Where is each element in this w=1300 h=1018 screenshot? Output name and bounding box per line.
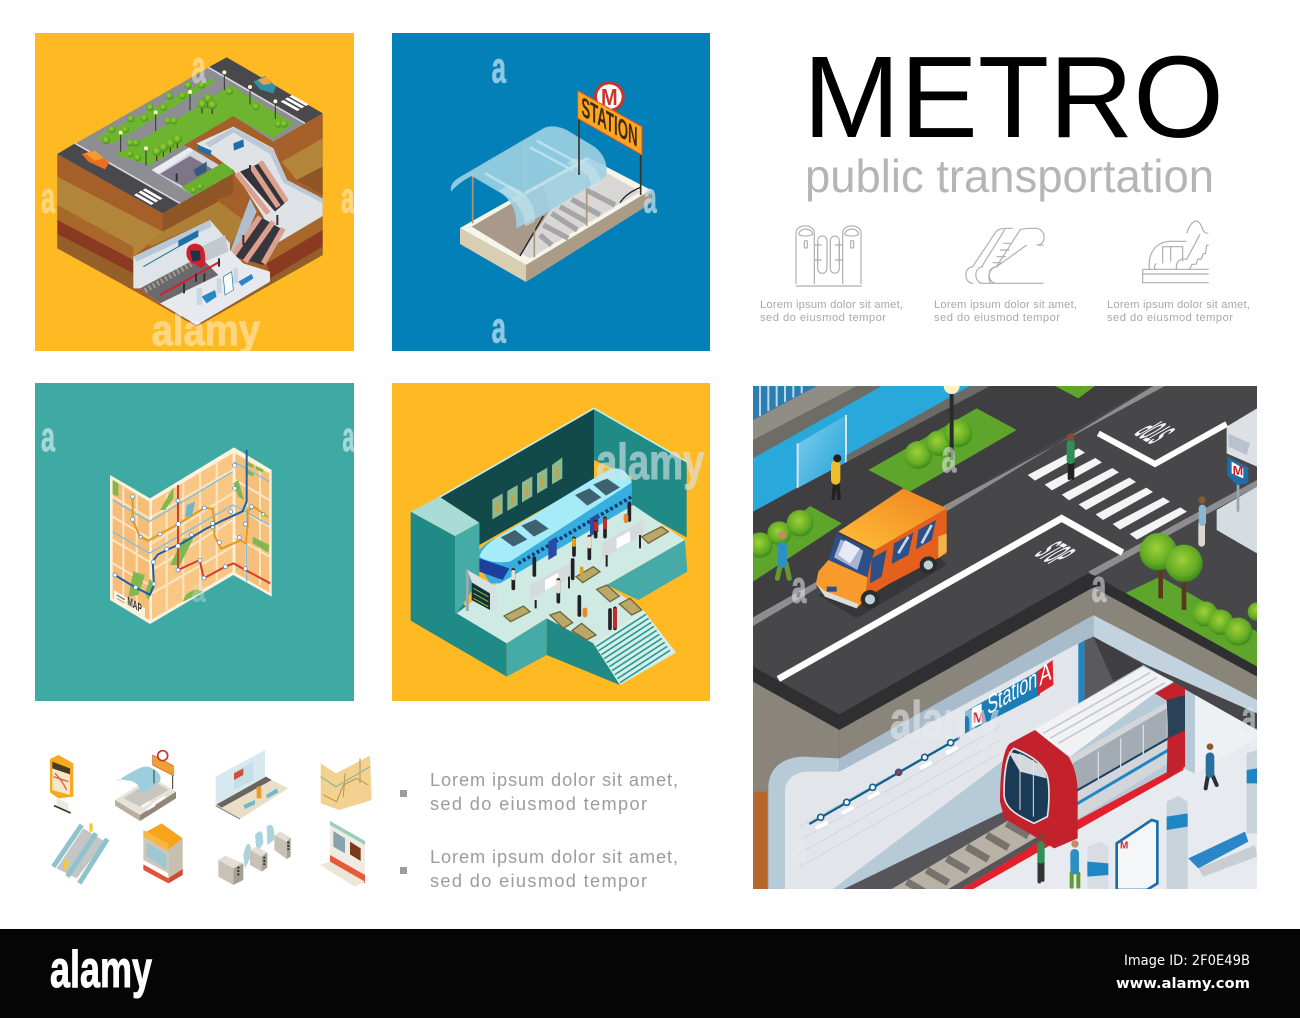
metro sign and right structures: M — [1233, 464, 1243, 478]
watermarks — [792, 431, 1257, 873]
footer bar — [0, 929, 1300, 1018]
track — [842, 810, 1057, 893]
panel: metro platform hall — [392, 383, 710, 701]
station name sign — [965, 655, 1053, 733]
line icon captions: sed do eiusmod tempor — [1107, 312, 1233, 324]
watermarks: a — [643, 175, 657, 223]
station name sign: Station — [987, 662, 1037, 721]
watermarks: a — [942, 431, 957, 482]
platform furniture — [1087, 750, 1257, 890]
soil block right face — [197, 113, 323, 327]
glass canopy — [451, 126, 607, 257]
metro sign and right structures — [1217, 408, 1257, 553]
icon: info kiosk — [50, 755, 73, 813]
watermark — [41, 42, 355, 355]
watermarks: a — [41, 413, 56, 460]
watermark: a — [192, 42, 206, 93]
metro train — [1000, 667, 1185, 848]
station name sign: A — [1039, 655, 1052, 692]
panel: underground station cutaway — [35, 33, 355, 355]
road slab edge — [753, 573, 1257, 890]
lawns and bushes — [747, 386, 1266, 667]
upper concourse and escalators — [197, 127, 323, 265]
van — [816, 488, 947, 618]
icon: turnstile — [796, 226, 862, 286]
station sign: M — [601, 84, 618, 110]
watermarks: a — [1242, 692, 1257, 743]
watermarks: a — [192, 573, 206, 610]
street and park surface — [57, 57, 323, 213]
kerbs — [753, 386, 1257, 626]
train — [479, 468, 632, 583]
platform floor and stairs — [457, 505, 687, 685]
pedestrians on street — [777, 434, 1206, 578]
watermarks: alamy — [890, 691, 999, 750]
road markings — [778, 424, 1227, 679]
watermarks: a — [1092, 561, 1107, 612]
benches and barriers — [504, 520, 668, 640]
icon: metro train and escalator — [1143, 221, 1209, 283]
soil block base — [57, 57, 323, 327]
map paper — [110, 447, 272, 624]
map legend: MAP — [127, 595, 142, 616]
watermark: a — [41, 175, 56, 223]
watermark: alamy — [152, 306, 261, 355]
passengers — [513, 503, 629, 628]
watermarks: a — [492, 45, 507, 93]
icon: map — [321, 756, 372, 810]
footer image id: Image ID: 2F0E49B — [1124, 953, 1250, 969]
line icons row — [795, 220, 1209, 287]
passengers on platform — [1038, 743, 1217, 887]
icon: platform section — [216, 750, 288, 820]
bullet text 1: sed do eiusmod tempor — [430, 794, 647, 814]
bullet text 2: Lorem ipsum dolor sit amet, — [430, 847, 678, 867]
road text: stop: STOP — [1125, 415, 1185, 449]
subtitle: public transportation — [805, 150, 1214, 202]
watermarks — [492, 45, 657, 353]
small icon set — [50, 750, 372, 886]
watermarks — [41, 413, 355, 610]
soil block left face — [57, 154, 257, 327]
line icon captions: Lorem ipsum dolor sit amet, — [934, 299, 1077, 311]
lower platform and train — [133, 165, 277, 325]
line icon captions: Lorem ipsum dolor sit amet, — [760, 299, 903, 311]
lamp post — [944, 378, 960, 460]
line icon captions: Lorem ipsum dolor sit amet, — [1107, 299, 1250, 311]
bullet text 1: Lorem ipsum dolor sit amet, — [430, 770, 678, 790]
bullet text 2: sed do eiusmod tempor — [430, 871, 647, 891]
icon: ticket wall — [320, 821, 365, 887]
panel: station entrance with canopy — [392, 33, 710, 353]
icon: turnstiles — [218, 825, 291, 885]
panel: folded metro map — [35, 383, 355, 701]
departure board — [467, 569, 497, 613]
trees right — [1140, 533, 1203, 610]
wall posters — [492, 457, 562, 519]
bullet text 2 — [400, 847, 678, 891]
platform furniture: M — [1120, 840, 1128, 851]
station sign: STATION — [581, 92, 638, 153]
line icon captions: sed do eiusmod tempor — [760, 312, 886, 324]
footer logo: alamy — [50, 941, 152, 999]
icon: ticket booth — [143, 823, 183, 883]
line icon captions — [760, 299, 1250, 324]
station sign — [578, 81, 642, 195]
road text: stop: STOP — [1025, 536, 1085, 570]
panel: street over metro station scene — [753, 386, 1257, 889]
map legend — [114, 590, 145, 620]
bullet text 1 — [400, 770, 678, 814]
line icon captions: sed do eiusmod tempor — [934, 312, 1060, 324]
icon: escalators — [53, 823, 107, 883]
road text: stop — [1025, 415, 1185, 570]
icon: escalator — [966, 228, 1044, 283]
icon: station entrance — [113, 751, 176, 821]
watermarks: a — [792, 562, 807, 613]
sidewalk shading — [753, 386, 1150, 617]
entrance base — [460, 157, 651, 282]
crosswalk — [1028, 448, 1187, 540]
building with glass front — [753, 386, 990, 512]
title: METRO — [803, 32, 1224, 162]
watermarks: a — [492, 305, 507, 353]
metro line diagram — [809, 737, 960, 828]
footer website: www.alamy.com — [1116, 976, 1250, 992]
watermarks: a — [792, 822, 807, 873]
cars — [82, 76, 276, 169]
platform — [960, 738, 1257, 890]
hall walls — [411, 408, 687, 677]
station wall — [753, 637, 1257, 890]
entrance pit — [152, 147, 233, 196]
station name sign: M — [973, 711, 985, 727]
